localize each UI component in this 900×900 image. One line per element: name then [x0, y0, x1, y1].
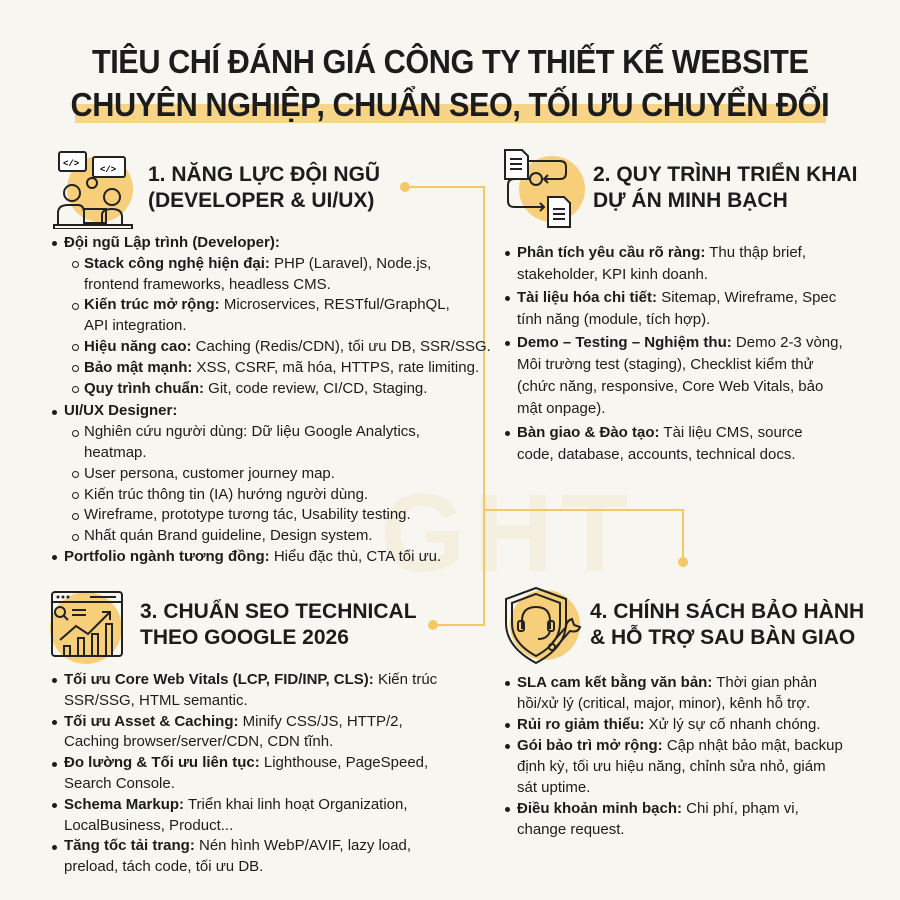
list 4: SLA cam kết bằng văn bản: Thời gian phản — [517, 674, 817, 691]
icon: SEO chart — [50, 591, 123, 664]
list 3: Tối ưu Core Web Vitals (LCP, FID/INP, CLS): Kiến trúc — [64, 671, 437, 688]
list 1: Wireframe, prototype tương tác, Usability testing. — [84, 506, 411, 523]
list 2: Tài liệu hóa chi tiết: Sitemap, Wireframe, Spec — [517, 289, 836, 306]
list 2: Demo – Testing – Nghiệm thu: Demo 2-3 vòng, — [517, 334, 843, 351]
list 2: stakeholder, KPI kinh doanh. — [517, 266, 708, 283]
list 3 — [52, 671, 437, 875]
list 1: Nhất quán Brand guideline, Design system. — [84, 527, 373, 544]
list 2 — [505, 244, 843, 463]
list 3: Tối ưu Asset & Caching: Minify CSS/JS, HTTP/2, — [64, 713, 403, 730]
heading 4: & HỖ TRỢ SAU BÀN GIAO — [590, 626, 855, 649]
list 3: Đo lường & Tối ưu liên tục: Lighthouse, PageSpeed, — [64, 754, 428, 771]
watermark: GHT — [380, 472, 636, 595]
list 3: Caching browser/server/CDN, CDN tĩnh. — [64, 733, 333, 750]
heading 1 — [148, 162, 380, 212]
icon: team: </> — [100, 165, 116, 175]
list 2: Phân tích yêu cầu rõ ràng: Thu thập brief, — [517, 244, 806, 261]
list 1: Hiệu năng cao: Caching (Redis/CDN), tối ưu DB, SSR/SSG. — [84, 338, 491, 355]
heading 3: THEO GOOGLE 2026 — [140, 626, 349, 649]
panel: team — [52, 151, 491, 565]
panel: warranty — [505, 586, 864, 838]
heading 4 — [590, 598, 864, 649]
icon: shield support — [505, 586, 582, 664]
title: CHUYÊN NGHIỆP, CHUẨN SEO, TỐI ƯU CHUYỂN ĐỔI — [71, 86, 829, 123]
heading 2: DỰ ÁN MINH BẠCH — [593, 189, 788, 212]
list 2: tính năng (module, tích hợp). — [517, 311, 710, 328]
list 3: LocalBusiness, Product... — [64, 817, 233, 834]
list 1: Bảo mật mạnh: XSS, CSRF, mã hóa, HTTPS, rate limiting. — [84, 359, 479, 376]
list 1: Quy trình chuẩn: Git, code review, CI/CD, Staging. — [84, 380, 427, 397]
list 1 — [52, 234, 491, 565]
list 2: mật onpage). — [517, 400, 605, 417]
list 1: Đội ngũ Lập trình (Developer): — [64, 234, 280, 251]
heading 2: 2. QUY TRÌNH TRIỂN KHAI — [593, 163, 857, 186]
title highlight — [75, 104, 826, 123]
list 4: hồi/xử lý (critical, major, minor), kênh hỗ trợ. — [517, 695, 810, 712]
heading 4: 4. CHÍNH SÁCH BẢO HÀNH — [590, 600, 864, 623]
panel: SEO — [50, 591, 437, 875]
list 4: Gói bảo trì mở rộng: Cập nhật bảo mật, backup — [517, 737, 843, 754]
list 4: sát uptime. — [517, 779, 590, 796]
panel: process — [504, 149, 857, 463]
list 1: Kiến trúc thông tin (IA) hướng người dùng. — [84, 486, 368, 503]
list 2: (chức năng, responsive, Core Web Vitals, bảo — [517, 378, 823, 395]
heading 1: (DEVELOPER & UI/UX) — [148, 189, 374, 212]
list 2: Môi trường test (staging), Checklist kiểm thử — [517, 356, 814, 373]
list 4: Điều khoản minh bạch: Chi phí, phạm vi, — [517, 800, 799, 817]
icon: process — [504, 149, 585, 228]
list 3: Schema Markup: Triển khai linh hoạt Organization, — [64, 796, 408, 813]
list 1: UI/UX Designer: — [64, 402, 177, 419]
title: TIÊU CHÍ ĐÁNH GIÁ CÔNG TY THIẾT KẾ WEBSITE — [92, 43, 808, 80]
list 3: Search Console. — [64, 775, 175, 792]
list 2: code, database, accounts, technical docs. — [517, 446, 796, 463]
list 1: Stack công nghệ hiện đại: PHP (Laravel), Node.js, — [84, 255, 431, 272]
list 1: heatmap. — [84, 444, 147, 461]
icon: team — [53, 151, 133, 229]
list 1: Kiến trúc mở rộng: Microservices, RESTful/GraphQL, — [84, 296, 450, 313]
title — [71, 43, 829, 123]
heading 3: 3. CHUẨN SEO TECHNICAL — [140, 600, 417, 623]
list 1: Nghiên cứu người dùng: Dữ liệu Google Analytics, — [84, 423, 420, 440]
list 1: frontend frameworks, headless CMS. — [84, 276, 331, 293]
list 3: Tăng tốc tải trang: Nén hình WebP/AVIF, lazy load, — [64, 837, 411, 854]
list 1: API integration. — [84, 317, 187, 334]
list 3: preload, tách code, tối ưu DB. — [64, 858, 263, 875]
heading 1: 1. NĂNG LỰC ĐỘI NGŨ — [148, 163, 380, 186]
heading 2 — [593, 162, 857, 212]
list 1: User persona, customer journey map. — [84, 465, 335, 482]
list 4 — [505, 674, 843, 838]
list 3: SSR/SSG, HTML semantic. — [64, 692, 248, 709]
icon: team: </> — [63, 159, 79, 169]
list 4: change request. — [517, 821, 625, 838]
heading 3 — [140, 599, 417, 649]
list 4: định kỳ, tối ưu hiệu năng, chỉnh sửa nhỏ, giám — [517, 758, 826, 775]
list 1: Portfolio ngành tương đồng: Hiểu đặc thù, CTA tối ưu. — [64, 548, 441, 565]
list 4: Rủi ro giảm thiểu: Xử lý sự cố nhanh chóng. — [517, 716, 821, 733]
list 2: Bàn giao & Đào tạo: Tài liệu CMS, source — [517, 424, 803, 441]
